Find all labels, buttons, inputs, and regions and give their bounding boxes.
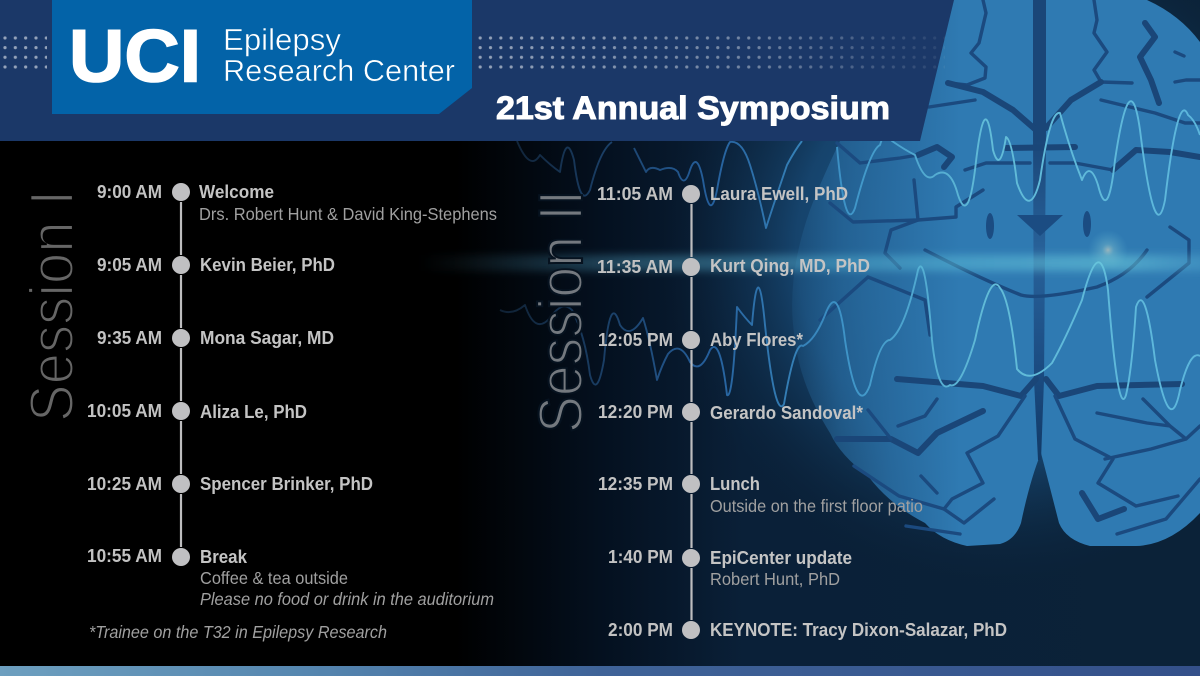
item: 10:05: 10:05 AM [87,401,162,421]
item: 1:40 epicenter [608,547,852,589]
logo text: Research Center: Research Center [223,53,455,88]
footer bar [0,666,1200,676]
item: 11:35 [597,256,870,277]
item: 10:05 [87,401,307,422]
item: 12:20: 12:20 PM [598,402,673,422]
session I label: Session I [18,190,87,422]
item: 10:55 break: Please no food or drink in the auditorium [200,589,494,609]
horizontal light streak [420,230,1200,271]
logo wordmark UCI: UCI [69,14,201,98]
item: 9:35: 9:35 AM [97,328,162,348]
item: 10:25 [87,474,373,494]
item: 9:35: Mona Sagar, MD [200,328,334,348]
item: 12:05: 12:05 PM [598,330,673,350]
EEG wave lines [500,101,1200,409]
item: 2:00 keynote: KEYNOTE: Tracy Dixon-Salazar, PhD [710,620,1007,640]
item: 12:20: Gerardo Sandoval* [710,403,863,423]
logo text: Epilepsy: Epilepsy [223,22,341,57]
item: 1:40 epicenter: 1:40 PM [608,547,673,567]
item: 11:05 [597,184,848,204]
item: 12:05 [598,330,803,350]
item: 12:35 lunch [598,474,923,516]
item: 10:55 break: 10:55 AM [87,546,162,566]
session II timeline [682,185,700,639]
item: 10:25: Spencer Brinker, PhD [200,474,373,494]
item: 11:35: 11:35 AM [597,257,673,277]
item: 9:00 welcome: 9:00 AM [97,182,162,202]
item: 9:05 [97,255,335,275]
session II label: Session II [527,190,596,433]
item: 1:40 epicenter: EpiCenter update [710,548,852,568]
item: 1:40 epicenter: Robert Hunt, PhD [710,569,840,589]
footnote: *Trainee on the T32 in Epilepsy Research [89,622,387,642]
item: 10:55 break [87,546,494,609]
logo panel [52,0,472,114]
item: 9:00 welcome [97,182,497,224]
item: 12:20 [598,402,863,423]
item: 10:55 break: Break [200,547,248,567]
background glow [600,0,1200,600]
item: 10:55 break: Coffee & tea outside [200,568,348,588]
brain illustration [792,0,1200,546]
item: 10:05: Aliza Le, PhD [200,402,307,422]
item: 9:05: 9:05 AM [97,255,162,275]
item: 12:35 lunch: Lunch [710,474,760,494]
item: 12:35 lunch: 12:35 PM [598,474,673,494]
dot pattern left [0,33,47,72]
item: 11:35: Kurt Qing, MD, PhD [710,256,870,276]
item: 9:00 welcome: Welcome [199,182,274,202]
title: 21st Annual Symposium [496,90,890,126]
dot pattern right [478,36,945,69]
item: 2:00 keynote: 2:00 PM [608,620,673,640]
item: 11:05: Laura Ewell, PhD [710,184,848,204]
item: 9:05: Kevin Beier, PhD [200,255,335,275]
session I timeline [172,183,190,566]
item: 12:35 lunch: Outside on the first floor patio [710,496,923,516]
header band [0,0,954,141]
item: 9:00 welcome: Drs. Robert Hunt & David King-Stephens [199,204,497,224]
item: 10:25: 10:25 AM [87,474,162,494]
item: 12:05: Aby Flores* [710,330,803,350]
item: 11:05: 11:05 AM [597,184,673,204]
item: 9:35 [97,328,334,348]
